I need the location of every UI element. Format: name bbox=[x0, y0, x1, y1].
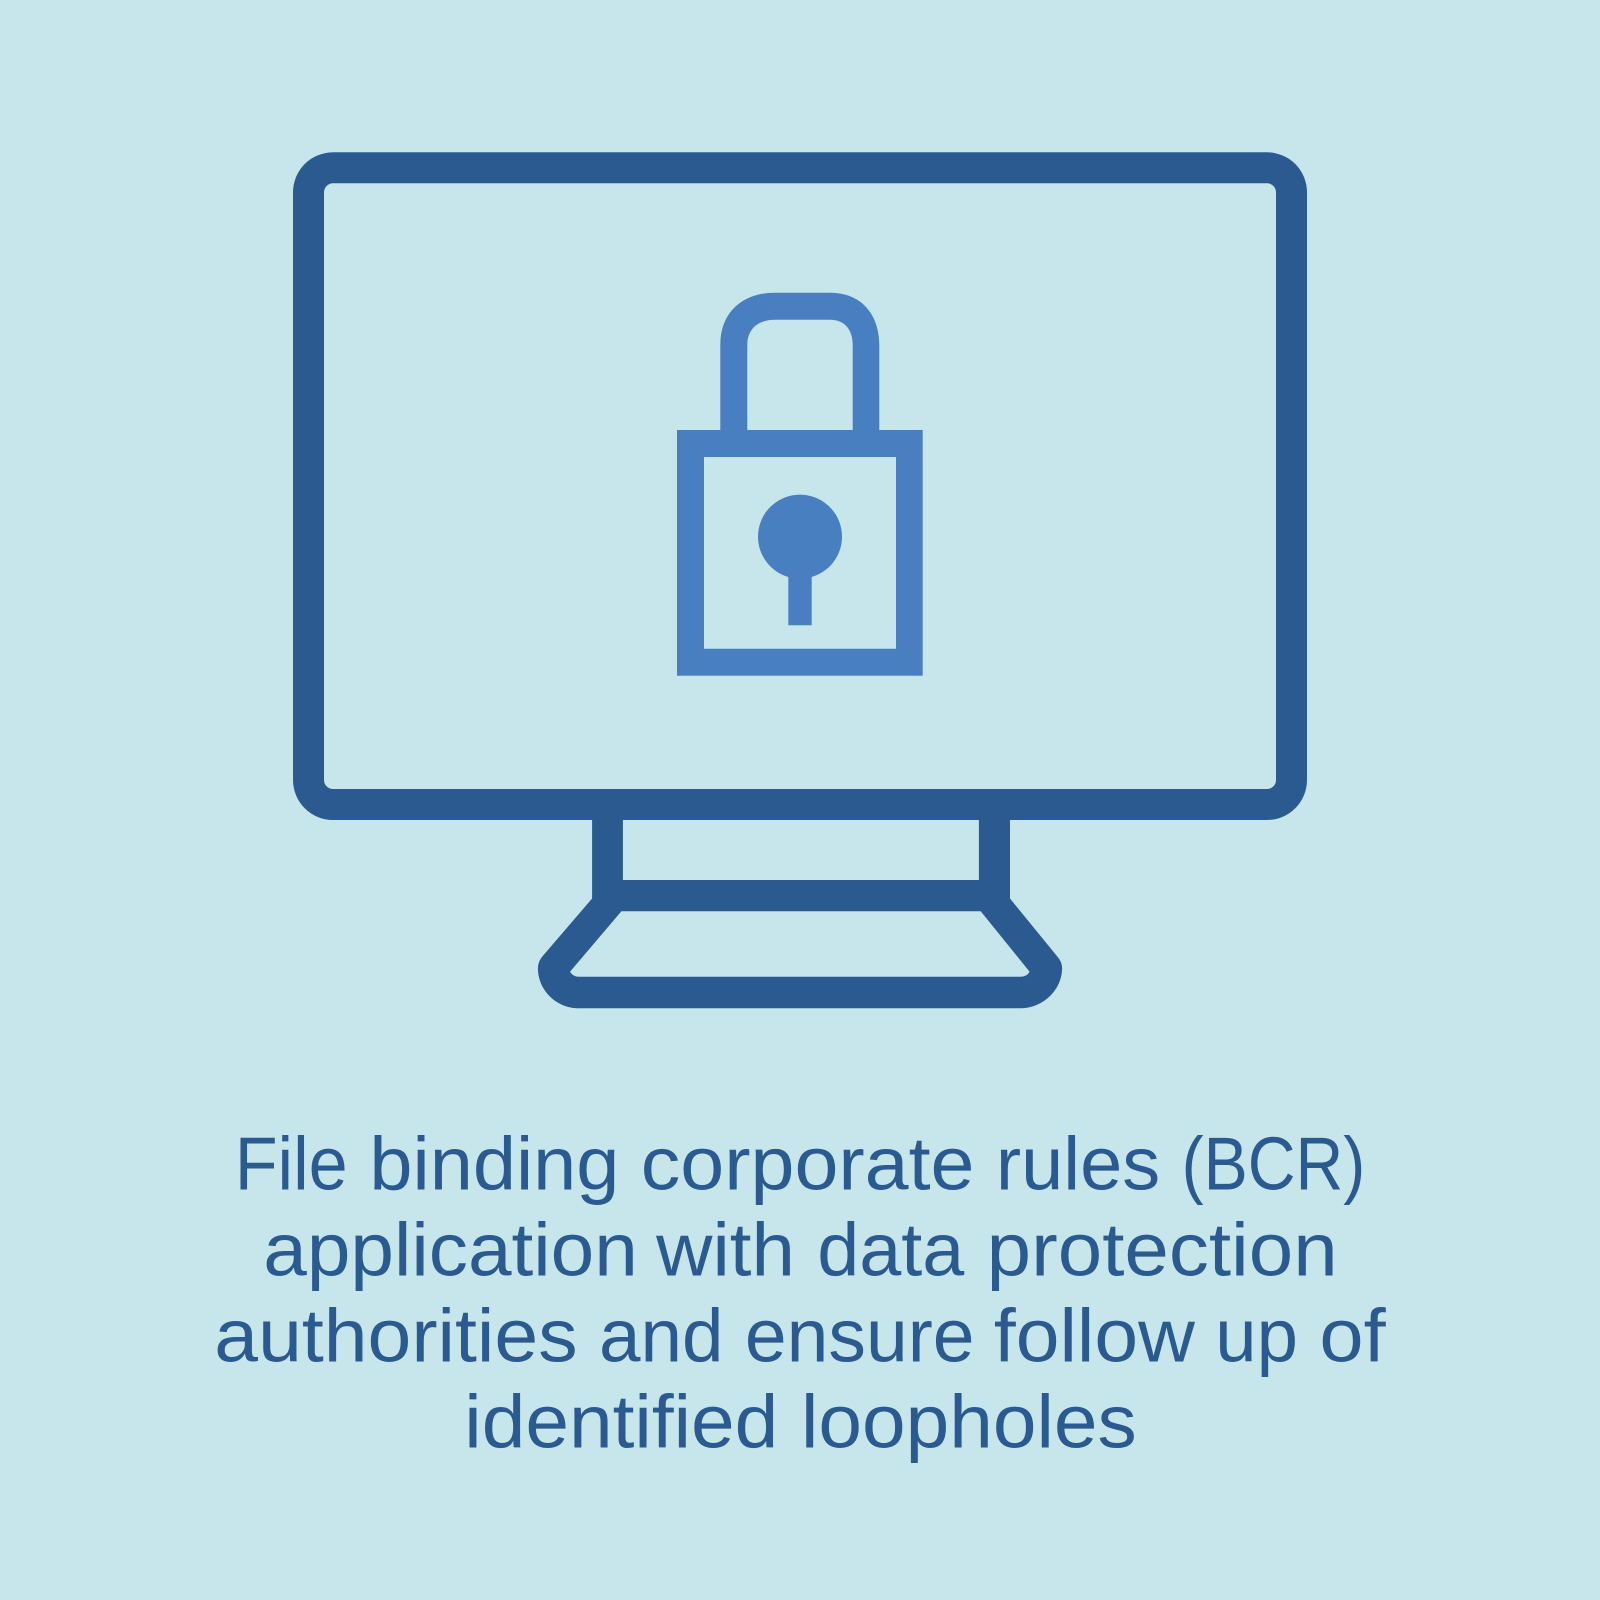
padlock body bbox=[677, 430, 923, 676]
caption text bbox=[214, 1121, 1386, 1463]
padlock shackle bbox=[720, 293, 879, 435]
caption text: identified bbox=[464, 1379, 778, 1463]
caption text: authorities bbox=[214, 1293, 578, 1377]
caption text: data bbox=[817, 1207, 965, 1291]
caption text: File bbox=[235, 1121, 348, 1205]
caption text: ensure bbox=[745, 1293, 974, 1377]
caption text: corporate bbox=[641, 1121, 974, 1205]
caption text: of bbox=[1319, 1293, 1386, 1377]
caption text: and bbox=[599, 1293, 724, 1377]
caption text: loopholes bbox=[801, 1379, 1137, 1463]
caption text: application bbox=[263, 1207, 638, 1291]
caption text: protection bbox=[987, 1207, 1338, 1291]
caption text: binding bbox=[369, 1121, 619, 1205]
icon: computer monitor with padlock bbox=[293, 152, 1307, 1008]
caption text: (BCR) bbox=[1182, 1121, 1365, 1205]
caption text: rules bbox=[996, 1121, 1160, 1205]
caption text: up bbox=[1215, 1293, 1298, 1377]
caption text: follow bbox=[994, 1293, 1196, 1377]
monitor stand bbox=[538, 815, 1062, 1008]
caption text: with bbox=[655, 1207, 795, 1291]
keyhole bbox=[758, 495, 842, 625]
monitor screen frame bbox=[293, 152, 1307, 820]
padlock bbox=[677, 293, 923, 676]
